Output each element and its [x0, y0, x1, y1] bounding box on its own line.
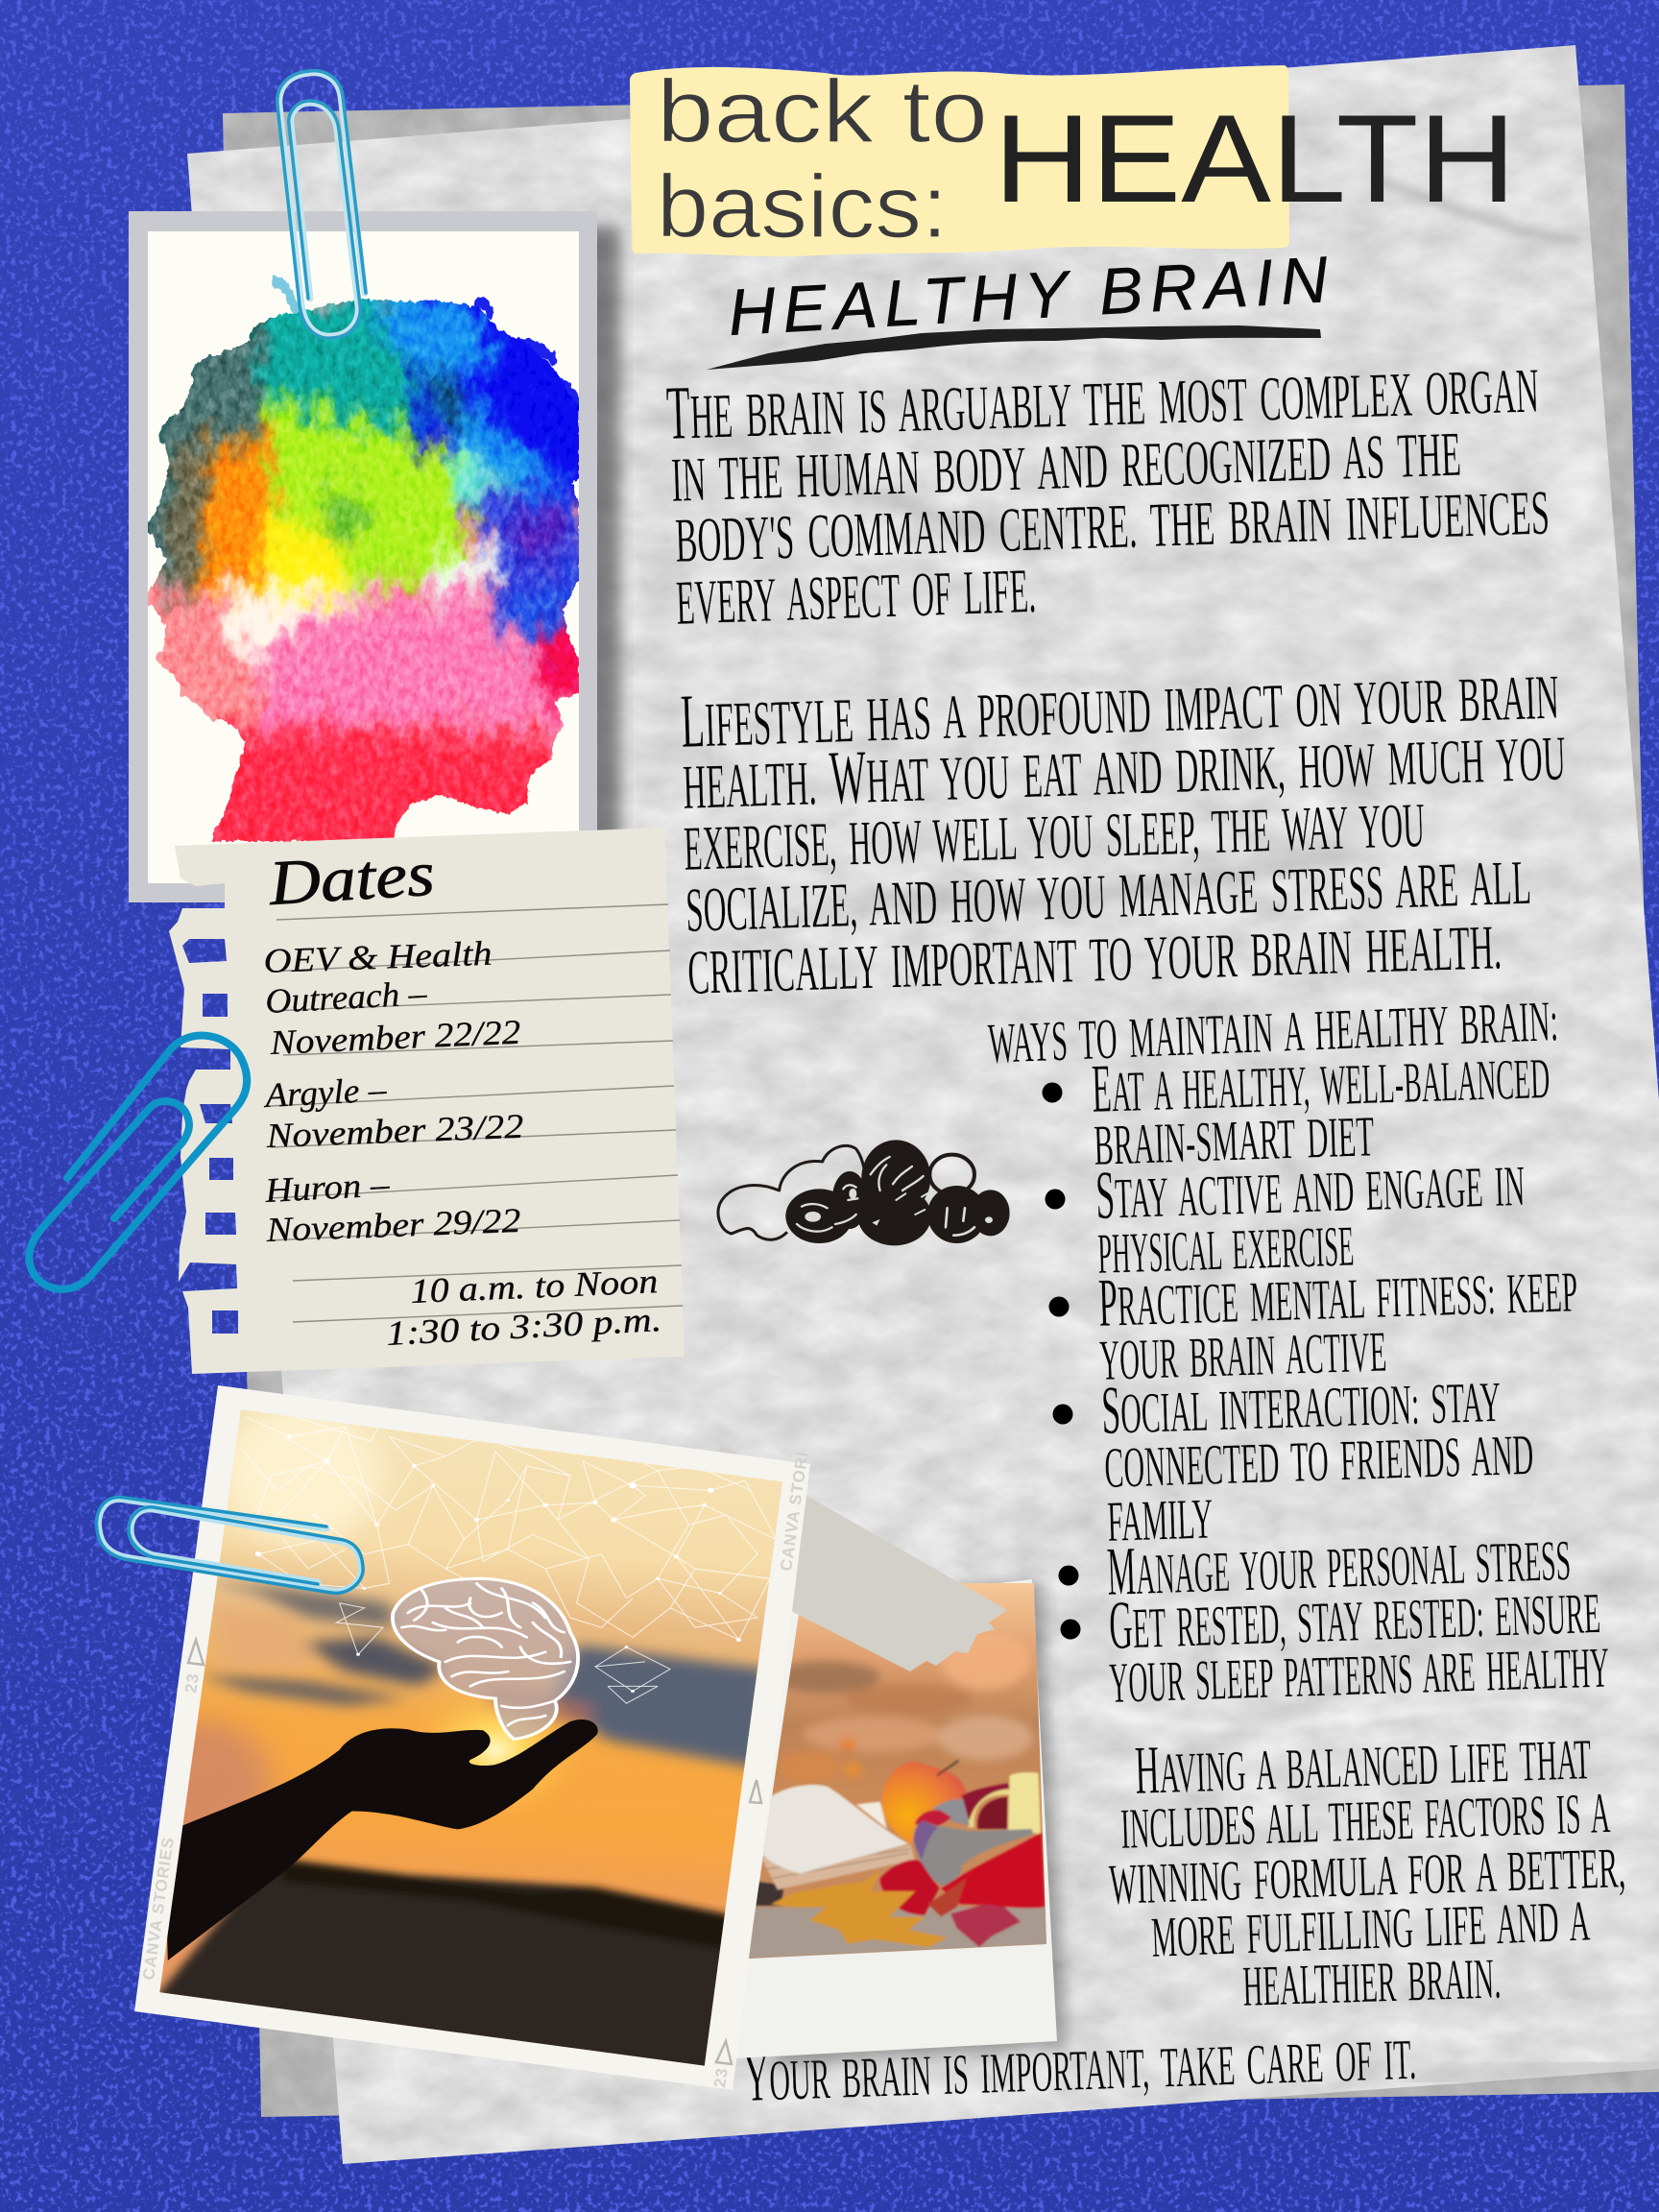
- polaroid frame: [735, 1579, 1057, 2058]
- note dates text: Outreach –: [264, 974, 428, 1021]
- note dates text: Argyle –: [262, 1070, 388, 1115]
- frame labels: CANVA STORIES: [139, 1836, 178, 1982]
- washi tape: [720, 1445, 1007, 1671]
- polaroid: autumn still life: [735, 1579, 1068, 2066]
- card frame: [129, 211, 597, 902]
- horizon land: [146, 1858, 739, 2083]
- clouds: [199, 1581, 770, 1769]
- frame triangles: [188, 1640, 761, 2064]
- note dates text: OEV & Health: [263, 934, 493, 980]
- note heading: Dates: Dates: [266, 839, 437, 919]
- card inner: [148, 231, 579, 883]
- note dates text: November 22/22: [269, 1013, 521, 1062]
- leaves: [771, 1870, 948, 1947]
- title line: basics: basics:: [657, 156, 948, 256]
- tips list: [1043, 1036, 1610, 1715]
- soft highlight: [221, 1407, 383, 1544]
- note paper: [169, 828, 685, 1374]
- photo image: [133, 1403, 795, 2083]
- polaroid photo: [742, 1581, 1049, 1961]
- intro paragraph: EVERY ASPECT OF LIFE.: [675, 556, 1037, 638]
- hand silhouette: [165, 1719, 598, 1960]
- heading: healthy brain: HEALTHY BRAIN: [727, 243, 1331, 349]
- note dates text: 10 a.m. to Noon: [410, 1262, 659, 1310]
- note dates text: 1:30 to 3:30 p.m.: [385, 1300, 662, 1353]
- heading underline brush stroke: [707, 325, 1321, 370]
- title word: HEALTH: HEALTH: [994, 88, 1516, 228]
- paper clip: note: [29, 1036, 247, 1289]
- glowing brain: [393, 1578, 578, 1739]
- note ruled lines: [271, 904, 683, 1322]
- still life objects: [748, 1761, 1049, 1959]
- bokeh: [771, 1632, 1034, 1783]
- dates note: [169, 828, 685, 1374]
- title: [657, 61, 1516, 256]
- photo frame: [134, 1385, 810, 2090]
- scarf: [933, 1799, 970, 1826]
- intro paragraph: [665, 344, 1551, 638]
- note dates text: [262, 934, 662, 1353]
- paper clip: photo: [96, 1497, 363, 1593]
- list item lines: FAMILY: [1106, 1487, 1214, 1553]
- list item lines: BRAIN-SMART DIET: [1093, 1104, 1375, 1177]
- paper clip: portrait card: [277, 71, 366, 338]
- note dates text: November 29/22: [265, 1201, 521, 1249]
- back paper sheet: [223, 84, 1659, 2117]
- mug: [1008, 1772, 1041, 1834]
- bullet marks: [1043, 1083, 1081, 1640]
- yellow highlight behind title: [630, 65, 1289, 256]
- title line: back to: back to: [657, 61, 988, 161]
- frame labels: 23: [181, 1671, 203, 1695]
- book: [760, 1845, 915, 1889]
- closing paragraph: [1108, 1717, 1626, 2018]
- paper creases: [653, 182, 1659, 2079]
- card: watercolor head portrait: [125, 211, 620, 908]
- network nodes: [255, 1434, 741, 1693]
- network lines: [240, 1407, 777, 1703]
- note dates text: Huron –: [263, 1165, 391, 1210]
- list item lines: [1091, 1036, 1610, 1715]
- watercolor head silhouette: [148, 275, 579, 843]
- frame labels: 23: [710, 2066, 732, 2089]
- sunset glow: [402, 1676, 589, 1823]
- dusk pink haze: [133, 1720, 271, 1848]
- icon: scribbled cloud: [718, 1140, 1010, 1245]
- apple: [881, 1762, 967, 1845]
- note dates text: November 23/22: [265, 1107, 524, 1155]
- main photo: brain over hand at sunset: [133, 1385, 811, 2090]
- hair curls: [149, 282, 577, 715]
- table: [748, 1908, 1049, 1959]
- polaroid shadow: [768, 1582, 1068, 2066]
- frame labels: CANVA STORI: [777, 1450, 811, 1573]
- card shadow: [576, 227, 620, 908]
- frame labels: [139, 1450, 811, 2089]
- lifestyle paragraph: [680, 651, 1567, 1008]
